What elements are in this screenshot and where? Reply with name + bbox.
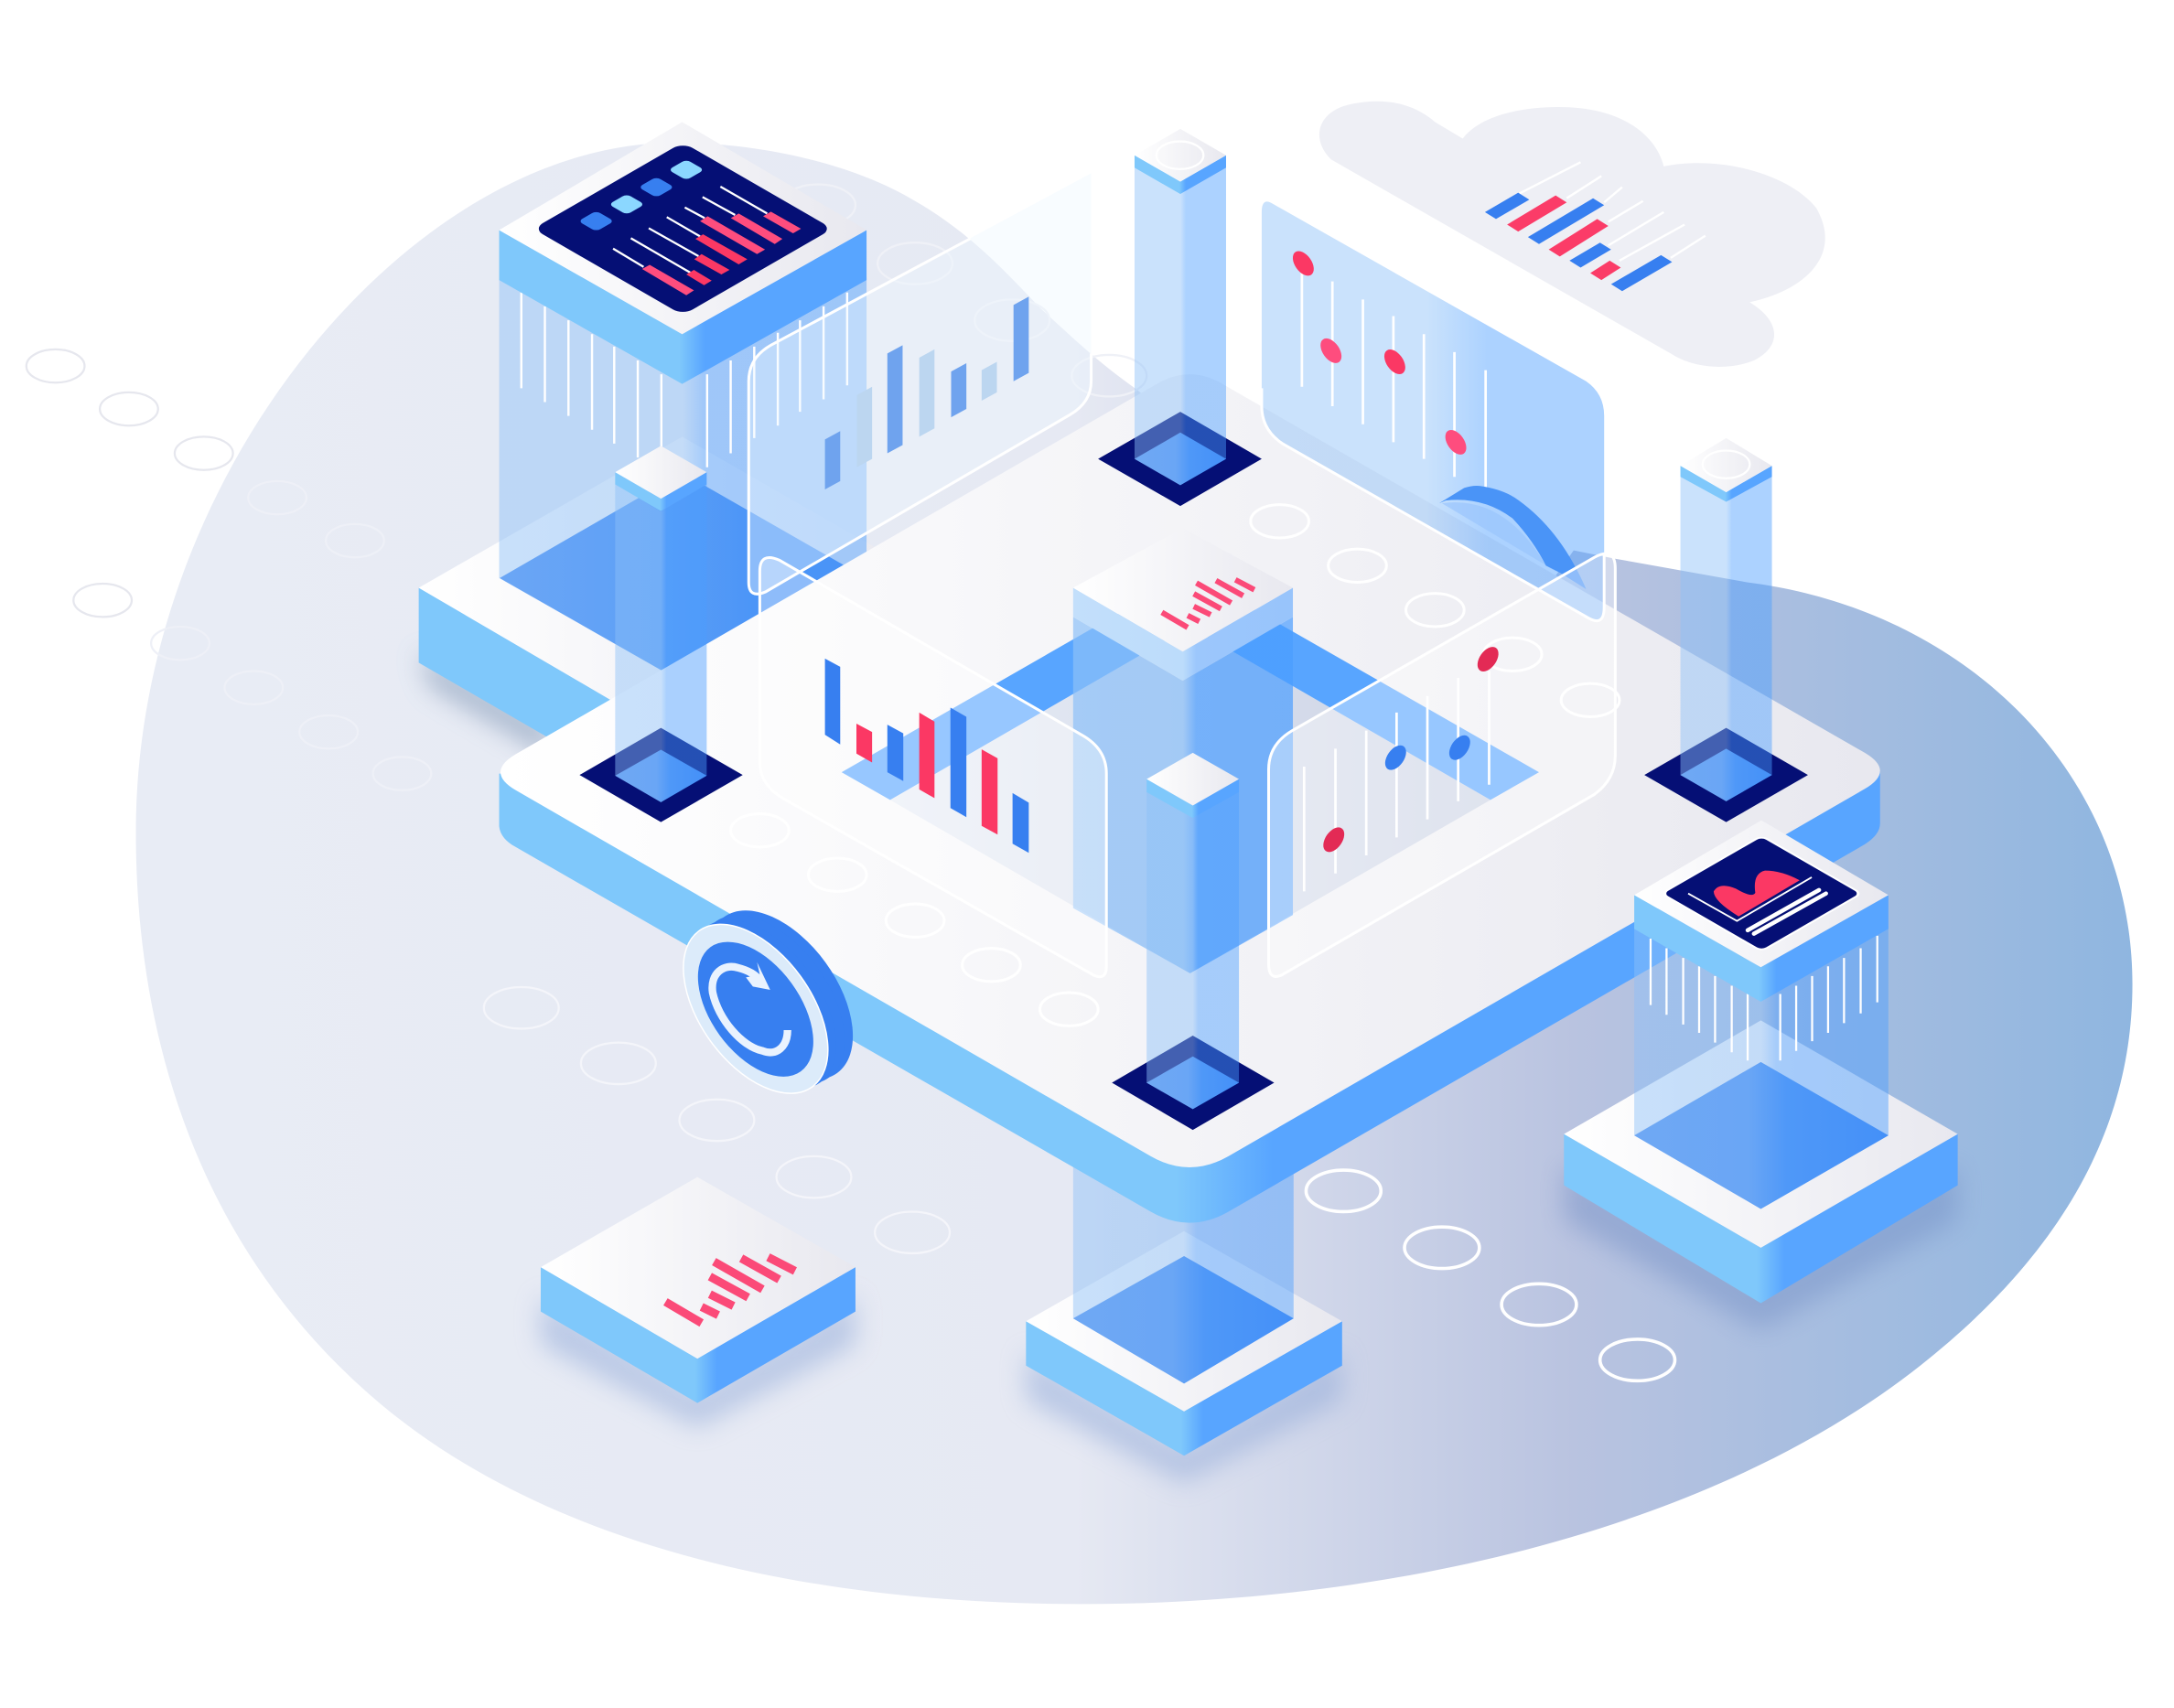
bottom right box with area chart screen xyxy=(1634,821,1889,1002)
central inner floor xyxy=(890,627,1491,973)
dotted path: circles behind upper box xyxy=(780,185,1146,396)
navy screen xyxy=(533,143,833,315)
navy floor tile under column B xyxy=(1644,728,1808,822)
front right glass panel with dot sliders xyxy=(1269,553,1615,976)
front left glass panel with bar chart xyxy=(759,558,1106,977)
sliders xyxy=(613,187,801,295)
platform circles lower left row xyxy=(731,814,1098,1026)
dotted path: upper left circles xyxy=(27,349,431,790)
area chart xyxy=(1714,871,1800,917)
keys xyxy=(578,159,705,231)
central glass column with cap xyxy=(1073,528,1293,973)
glass column B xyxy=(1681,438,1772,801)
navy screen xyxy=(1662,836,1861,951)
glass column D xyxy=(1146,753,1239,1109)
background blob xyxy=(135,143,2133,1604)
back left glass panel with bars xyxy=(748,173,1092,594)
platform circles upper right row xyxy=(1251,505,1620,716)
bottom right glass column with lines xyxy=(1634,926,1889,1208)
central blue chevron band xyxy=(842,573,1539,800)
upper left platform xyxy=(419,436,945,815)
bottom right platform xyxy=(1564,1020,1958,1331)
coin with refresh arrow icon xyxy=(654,885,882,1120)
dotted path: lower right circles xyxy=(1306,1170,1674,1380)
navy floor tile under column A xyxy=(1098,412,1262,506)
glass column C xyxy=(615,446,706,802)
navy floor tile under column D xyxy=(1112,1036,1275,1130)
bottom centre platform with glass xyxy=(1026,1137,1342,1484)
upper left glass column xyxy=(500,277,866,682)
navy floor tile under column C xyxy=(579,728,743,822)
upper left box with control screen xyxy=(500,122,866,384)
glass column A xyxy=(1135,129,1226,485)
bottom left tile with bars xyxy=(541,1177,856,1428)
back right blue panel with dot sliders xyxy=(1262,201,1604,621)
main platform xyxy=(500,374,1880,1223)
dotted path: lower left circles xyxy=(484,987,950,1253)
cloud with bar chart xyxy=(1319,102,1825,367)
blue floor xyxy=(500,473,866,682)
half coin behind panel xyxy=(1439,486,1587,589)
